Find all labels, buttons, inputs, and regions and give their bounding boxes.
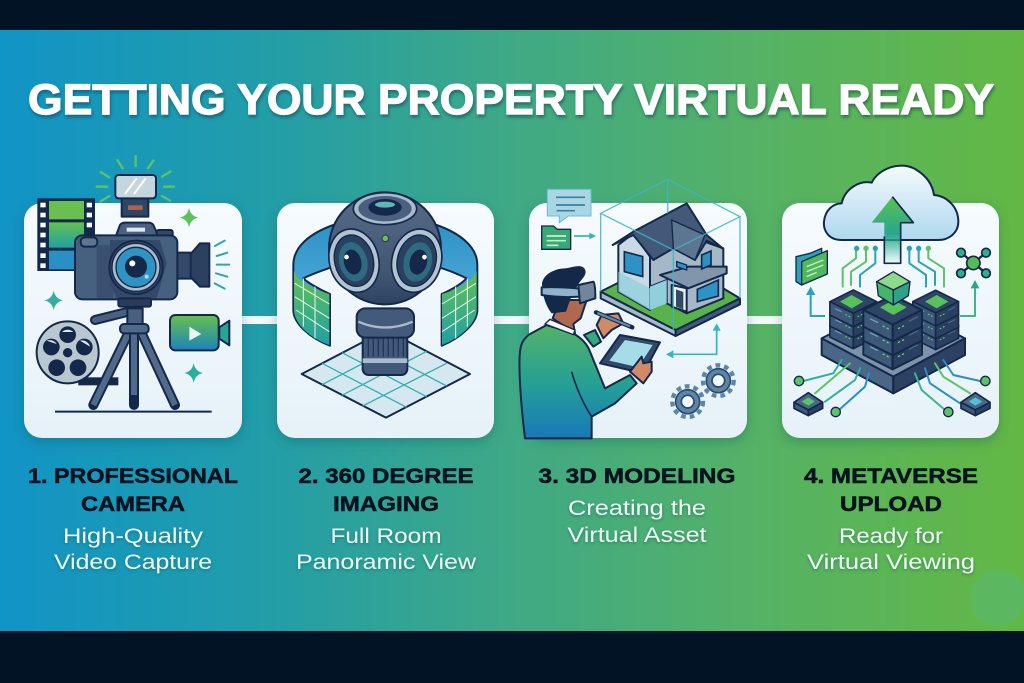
decorative corner circle (970, 570, 1024, 626)
neck and face (553, 300, 587, 333)
step 1 heading: 1. PROFESSIONAL (28, 465, 238, 488)
bottom dark bar (0, 631, 1024, 683)
panel 1 card (24, 203, 242, 438)
icon: film reel (37, 321, 118, 385)
arrow: to folders (806, 287, 825, 316)
tablet (600, 335, 660, 373)
house platform (601, 257, 740, 336)
top dark bar (0, 0, 1024, 30)
panorama band right (437, 225, 477, 346)
icon: folder (542, 226, 571, 249)
isometric floor grid (302, 330, 470, 418)
arm and hands (584, 330, 601, 347)
chip right (961, 393, 990, 416)
step 4 description: Ready for (839, 525, 943, 548)
step 4 description (807, 525, 975, 574)
panel 2: 360 degree imaging (277, 192, 494, 438)
camera illustration (37, 156, 229, 412)
icon: folders (796, 248, 827, 285)
data lines to cloud (843, 246, 944, 287)
icon: camera body (75, 223, 177, 307)
step 4 heading: UPLOAD (840, 493, 942, 516)
step 4 description: Virtual Viewing (807, 551, 975, 574)
step 2 description: Full Room (330, 525, 442, 548)
camera barrel (357, 308, 414, 375)
collar (545, 319, 575, 335)
step 4 label (804, 465, 978, 574)
person with headset (519, 266, 660, 438)
step 3 description (568, 497, 707, 547)
icon: gears (672, 365, 734, 417)
panel 1: professional camera (24, 156, 242, 438)
top lens (353, 193, 417, 225)
step 4 heading: 4. METAVERSE (804, 465, 978, 488)
icon: flash head (115, 175, 156, 217)
VR headset (542, 287, 581, 297)
icon: lens hood (175, 243, 209, 287)
hair (542, 266, 586, 313)
panorama band left (293, 225, 333, 346)
panel 4 card (782, 203, 999, 438)
circuit lines (803, 360, 980, 411)
sweater (519, 325, 637, 438)
step 2 description: Panoramic View (296, 551, 477, 574)
modeling illustration (519, 179, 740, 438)
ground line (55, 409, 212, 415)
icon: network nodes (957, 248, 990, 278)
step 2 heading: IMAGING (333, 493, 439, 516)
icon: chat bubble (547, 189, 591, 223)
icon: film strip (37, 198, 95, 271)
step 3 description: Creating the (568, 497, 706, 520)
arrow: model feedback (666, 323, 721, 358)
status light (382, 235, 389, 242)
step 3 label (538, 465, 736, 547)
house (613, 203, 727, 313)
icon: video camera (170, 315, 229, 350)
step 1 label (28, 465, 238, 574)
step 1 description: Video Capture (54, 551, 212, 574)
upload illustration (794, 166, 990, 417)
arrow: folder to model (574, 233, 596, 239)
icon: sound rays (215, 241, 229, 289)
arrow: to network (960, 280, 979, 316)
left lens (322, 224, 386, 298)
circuit endpoints (794, 376, 990, 417)
title: GETTING YOUR PROPERTY VIRTUAL READY (28, 76, 994, 124)
wireframe cube (601, 179, 740, 330)
panel 2 card (277, 203, 494, 438)
step 4 heading (804, 465, 978, 516)
icon: tripod (93, 308, 175, 405)
360 camera illustration (293, 192, 477, 418)
panel 3: 3D modeling (519, 179, 747, 438)
icon: flash rays (97, 156, 174, 201)
step 1 description: High-Quality (63, 525, 204, 548)
icon: sparkles (44, 208, 203, 383)
step 2 heading (298, 465, 474, 516)
step 2 label (296, 465, 477, 574)
icon: cloud (824, 166, 958, 240)
icon: green cube (877, 272, 910, 305)
sleeve fold (572, 372, 592, 417)
360 sphere (322, 192, 448, 304)
panel 4: metaverse upload (782, 166, 999, 438)
step 3 heading: 3. 3D MODELING (538, 465, 736, 488)
step 2 heading: 2. 360 DEGREE (298, 465, 474, 488)
step 1 heading: CAMERA (81, 493, 185, 516)
upward arrow (872, 197, 913, 263)
step 2 description (296, 525, 477, 574)
step 3 description: Virtual Asset (568, 524, 707, 547)
right lens (385, 224, 448, 298)
icon: main lens (109, 241, 163, 294)
step 1 heading (28, 465, 238, 516)
step 1 description (54, 525, 212, 574)
server racks (830, 290, 959, 369)
connectors between panels (236, 316, 789, 324)
server base (822, 302, 965, 393)
panel 3 card (529, 203, 747, 438)
chip left (794, 393, 823, 416)
